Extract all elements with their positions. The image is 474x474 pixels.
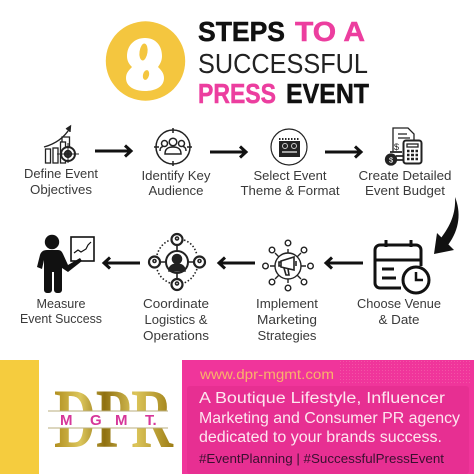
label: create detailed event budget	[358, 168, 452, 198]
icon: budget document and calculator: $	[394, 142, 399, 152]
icon: event theme calendar	[271, 129, 307, 165]
label: identify key audience: Identify Key	[142, 168, 211, 183]
logo: DPR MGMT: T.	[145, 412, 157, 429]
agency description: dedicated to your brands success.	[199, 429, 442, 446]
title: EVENT	[286, 78, 369, 109]
panel: yellow side bar	[0, 360, 39, 474]
title: PRESS	[198, 78, 276, 109]
label: identify key audience	[142, 168, 211, 198]
arrow 6	[104, 258, 140, 268]
title	[198, 16, 369, 109]
arrow 3	[325, 146, 361, 158]
label: measure event success: Event Success	[20, 311, 102, 326]
arrow 4	[326, 258, 363, 268]
label: choose venue and date	[357, 296, 441, 327]
label: select event theme and format	[240, 168, 340, 198]
agency description: Marketing and Consumer PR agency	[199, 410, 460, 427]
label: implement marketing strategies	[256, 296, 318, 343]
label: define event objectives	[24, 166, 98, 197]
label: select event theme and format: Select Event	[254, 168, 327, 183]
logo: DPR MGMT: M	[115, 412, 128, 429]
label: measure event success: Measure	[36, 296, 86, 311]
logo: DPR MGMT: M	[60, 412, 72, 429]
icon: person presenting chart	[37, 235, 94, 293]
icon: bar chart with target	[44, 126, 79, 163]
logo: DPR MGMT	[48, 372, 174, 466]
title: TO A	[295, 16, 365, 47]
agency description: A Boutique Lifestyle, Influencer	[199, 390, 445, 407]
panel: pink agency info	[182, 360, 474, 474]
arrow 1	[95, 146, 131, 156]
label: coordinate logistics and operations: Logistics &	[144, 312, 208, 327]
label: implement marketing strategies: Strategies	[258, 328, 317, 343]
label: create detailed event budget: Create Detailed	[358, 168, 452, 183]
icon: budget document and calculator	[386, 128, 422, 165]
label: coordinate logistics and operations: Operations	[143, 328, 210, 343]
label: coordinate logistics and operations	[143, 296, 210, 343]
agency description	[199, 390, 460, 446]
label: choose venue and date: & Date	[378, 312, 420, 327]
curved arrow down to venue	[434, 197, 459, 254]
icon: calendar with clock	[375, 240, 429, 293]
label: coordinate logistics and operations: Coordinate	[143, 296, 209, 311]
label: define event objectives: Define Event	[24, 166, 98, 181]
arrow 2	[210, 146, 246, 158]
title: STEPS	[198, 16, 285, 47]
icon: megaphone hub	[263, 240, 313, 291]
label: create detailed event budget: Event Budget	[365, 183, 445, 198]
icon: target audience	[154, 128, 192, 166]
label: define event objectives: Objectives	[30, 182, 92, 197]
logo: DPR MGMT: G	[90, 412, 102, 429]
badge: number 8	[106, 21, 185, 101]
icon: budget document and calculator: $	[389, 156, 394, 164]
label: select event theme and format: Theme & Format	[240, 183, 340, 198]
arrow 5	[219, 258, 255, 268]
title: SUCCESSFUL	[198, 48, 368, 79]
hashtags: #EventPlanning | #SuccessfulPressEvent	[199, 452, 445, 466]
label: implement marketing strategies: Marketing	[257, 312, 317, 327]
icon: coordination network	[149, 234, 205, 290]
label: identify key audience: Audience	[148, 183, 204, 198]
website url: www.dpr-mgmt.com	[199, 367, 334, 382]
label: choose venue and date: Choose Venue	[357, 296, 441, 311]
label: measure event success	[20, 296, 102, 326]
label: implement marketing strategies: Implement	[256, 296, 318, 311]
logo: DPR MGMT: DPR	[54, 372, 174, 466]
